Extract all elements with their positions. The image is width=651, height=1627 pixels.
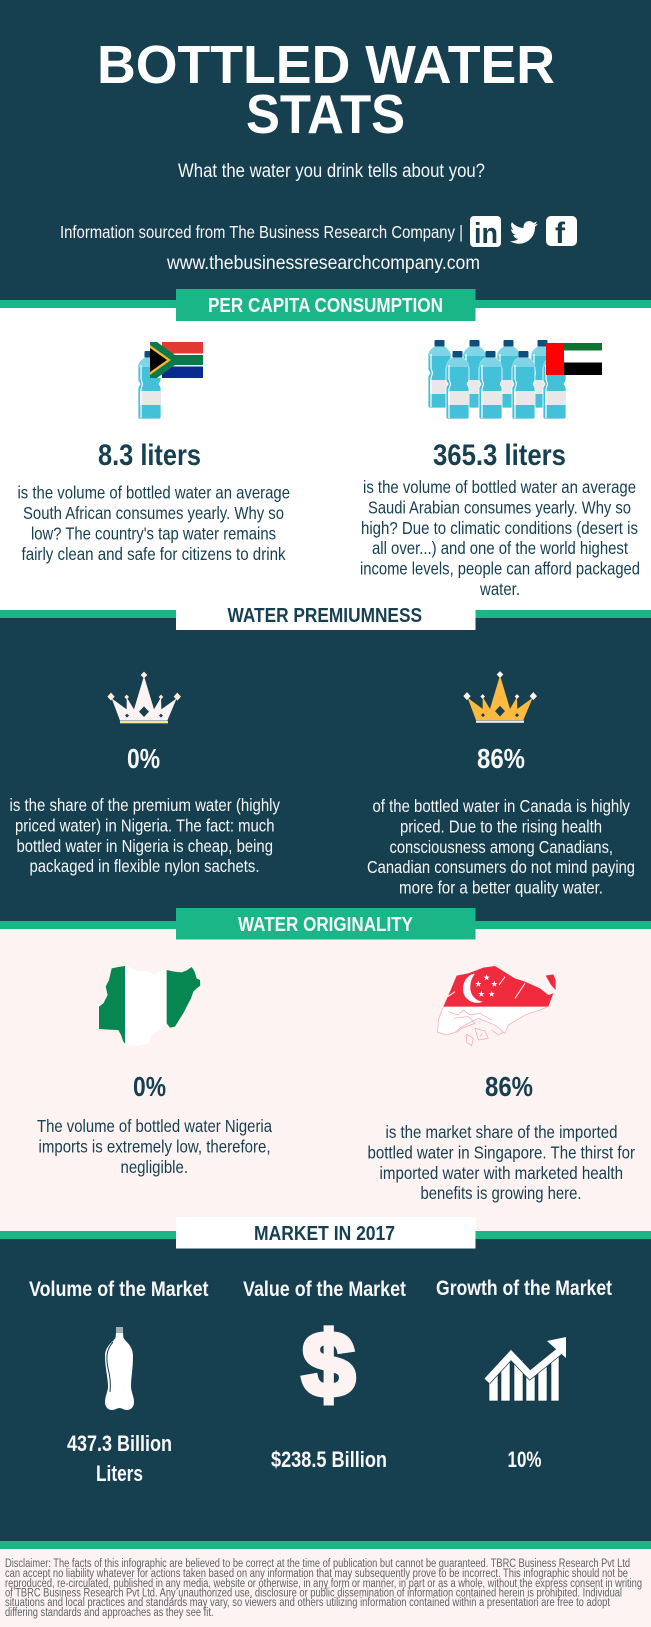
panel: header background <box>0 0 651 300</box>
stat: volume value: 437.3 Billion <box>67 1431 172 1456</box>
panel: water premiumness <box>0 610 651 921</box>
icon: bottle with South African flag <box>138 342 203 419</box>
title: STATS <box>246 83 405 145</box>
text: Canada premium: more for a better quality water. <box>399 878 603 898</box>
stat: 0% Nigeria premium: 0% <box>127 743 160 774</box>
panel: disclaimer footer <box>0 1541 651 1627</box>
heading: growth of the market: Growth of the Market <box>436 1276 612 1300</box>
icon: twitter <box>510 221 538 244</box>
text: Canada premium: consciousness among Canadians, <box>390 837 613 857</box>
stat: 86% Canada premium: 86% <box>477 743 525 774</box>
stat: 365.3 liters: 365.3 liters <box>433 439 566 472</box>
banner: market in 2017: MARKET IN 2017 <box>254 1222 395 1245</box>
icon: dollar sign: $ <box>302 1314 355 1416</box>
text: Nigeria premium: priced water) in Nigeria. The fact: much <box>15 815 274 835</box>
text: Nigeria imports: negligible. <box>120 1157 188 1177</box>
text: Nigeria premium: bottled water in Nigeria is cheap, being <box>16 836 273 856</box>
text: disclaimer: differing standards and approaches as they see fit. <box>5 1607 214 1619</box>
text: South Africa: is the volume of bottled water an average <box>18 482 290 502</box>
icon: bottles with UAE flag <box>428 340 602 419</box>
text: disclaimer <box>5 1558 642 1619</box>
panel: water originality <box>0 921 651 1231</box>
stat: market value: $238.5 Billion <box>271 1447 387 1472</box>
text: Nigeria imports: imports is extremely low, therefore, <box>38 1136 270 1156</box>
stat: growth value: 10% <box>508 1447 542 1472</box>
text: Singapore imports: benefits is growing here. <box>420 1183 582 1203</box>
text: Nigeria premium: packaged in flexible nylon sachets. <box>30 856 260 876</box>
title: BOTTLED WATER <box>97 35 555 95</box>
stat: 86% Singapore imports: 86% <box>485 1071 533 1102</box>
stat: volume value: Liters <box>96 1461 143 1486</box>
text: South Africa <box>18 482 290 564</box>
panel: market in 2017 <box>0 1231 651 1541</box>
text: Singapore imports: is the market share of the imported <box>386 1122 618 1142</box>
heading: value of the market: Value of the Market <box>243 1277 406 1301</box>
panel: per capita consumption <box>0 300 651 610</box>
text: Nigeria premium <box>10 795 280 876</box>
heading: volume of the market: Volume of the Market <box>29 1277 208 1301</box>
title <box>97 35 555 145</box>
icon: plastic bottle <box>105 1327 134 1410</box>
icon: white crown <box>107 672 181 723</box>
stat: 0% Nigeria imports: 0% <box>133 1071 166 1102</box>
stat: 8.3 liters: 8.3 liters <box>98 439 201 472</box>
text: South Africa: low? The country's tap water remains <box>31 524 276 544</box>
source line: Information sourced from The Business Research Company | <box>60 222 463 242</box>
subtitle: What the water you drink tells about you? <box>178 161 485 182</box>
text: Canada premium <box>367 796 635 898</box>
icon: facebook <box>546 216 577 250</box>
banner: market in 2017 <box>176 1217 476 1248</box>
icon: Singapore map flag <box>438 966 556 1046</box>
text: South Africa: South African consumes yearly. Why so <box>23 503 284 523</box>
text: Nigeria imports: The volume of bottled water Nigeria <box>37 1116 272 1136</box>
text: Saudi Arabia: water. <box>479 579 520 599</box>
banner: per capita consumption: PER CAPITA CONSUMPTION <box>208 294 443 317</box>
banner: water originality <box>176 908 476 940</box>
banner: water originality: WATER ORIGINALITY <box>238 913 413 936</box>
text: Singapore imports <box>368 1122 635 1203</box>
text: South Africa: fairly clean and safe for citizens to drink <box>22 544 286 564</box>
icon: Nigeria map flag <box>99 966 200 1046</box>
text: Nigeria premium: is the share of the premium water (highly <box>10 795 280 815</box>
banner: water premiumness <box>176 598 476 630</box>
stat: volume value <box>67 1431 172 1486</box>
text: Saudi Arabia <box>360 477 640 599</box>
icon: gold crown <box>463 671 537 723</box>
banner: water premiumness: WATER PREMIUMNESS <box>228 604 422 627</box>
banner: per capita consumption <box>176 289 476 321</box>
icon: growth chart <box>487 1337 566 1401</box>
text: Nigeria imports <box>37 1116 272 1177</box>
icon: facebook: f <box>555 217 566 250</box>
icon: linkedin: in <box>474 218 498 250</box>
website url: www.thebusinessresearchcompany.com <box>166 252 480 274</box>
text: Canada premium: priced. Due to the rising health <box>400 816 602 836</box>
